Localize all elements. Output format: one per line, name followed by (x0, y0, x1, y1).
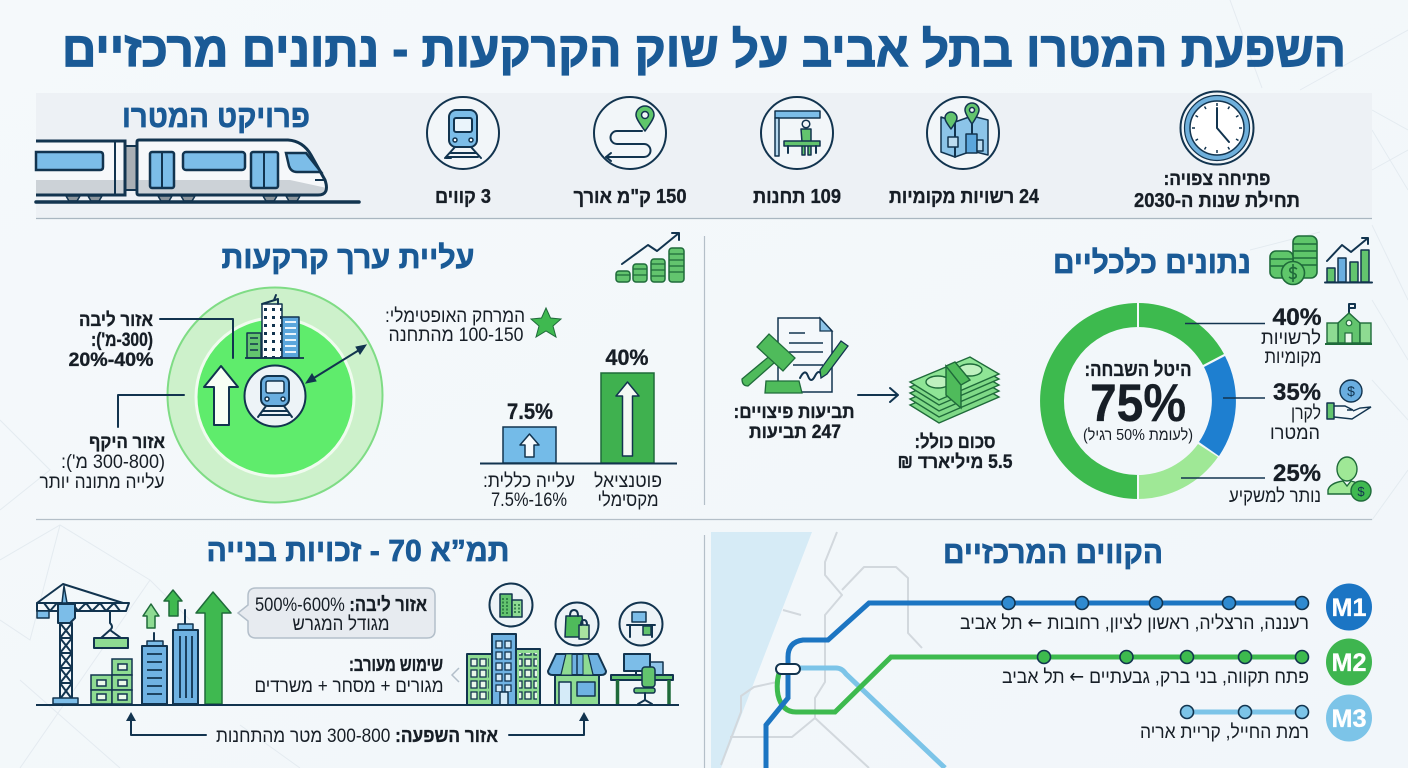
icon: coin stacks with rising line (616, 233, 684, 282)
label: general rise: 16%-7.5% (491, 489, 567, 511)
callout: optimal distance: 100-150 מהתחנה (388, 325, 524, 346)
badge M1 (1326, 584, 1372, 630)
legend: 35% metro fund (1223, 379, 1371, 444)
bar: maximum potential: 40% (606, 345, 648, 370)
heading: תמ”א 70 - זכויות בנייה (206, 533, 510, 568)
stat: expected opening (1134, 92, 1300, 212)
legend: 25% investor share: נותר למשקיע (1229, 485, 1321, 507)
callout: periphery zone (40, 395, 184, 493)
center label: 75% (1090, 374, 1186, 433)
bar: general rise: 7.5% (507, 399, 553, 424)
icon: low tower (142, 633, 167, 704)
legend: 25% investor share (1181, 457, 1371, 507)
panel: TAMA 70 building rights (36, 533, 679, 747)
icon: coins (1270, 236, 1317, 284)
label: maximum potential: מקסימלי (598, 489, 658, 511)
center label (1083, 359, 1193, 444)
line M2 (777, 650, 1308, 712)
icon: hand with coin (1327, 380, 1371, 419)
callout: periphery zone: אזור היקף (89, 432, 165, 453)
text: total amount (898, 432, 1013, 473)
badge M3 (1326, 694, 1372, 742)
callout: core zone 500-600 percent (238, 588, 435, 638)
label: 3 קווים (435, 186, 491, 208)
icon: station shelter (775, 111, 820, 156)
panel: metro project header band (36, 92, 1372, 218)
panel: land value increase (40, 233, 684, 511)
arrow (858, 388, 898, 402)
label: 109 תחנות (753, 186, 841, 208)
badge M1: M1 (1332, 594, 1367, 622)
arrow: small up light (143, 604, 159, 628)
line M3 stations (1180, 706, 1308, 718)
icon: bar chart with trend (1325, 238, 1372, 282)
icon: building blocks (91, 659, 132, 704)
line M1 (766, 596, 1308, 768)
callout: periphery zone: (300-800 מ'): (61, 451, 165, 473)
stat: 150 km length (574, 97, 686, 208)
callout: core zone (68, 310, 233, 371)
icon: route with pin (606, 106, 654, 161)
legend: 35% metro fund: המטרו (1270, 422, 1320, 444)
bar: maximum potential (601, 345, 654, 463)
map: sea and roads (711, 532, 922, 768)
icon: residential towers (467, 634, 540, 705)
text: compensation claims: תביעות פיצויים: (734, 402, 854, 423)
badge M2 (1326, 638, 1372, 686)
label: 150 ק"מ אורך (574, 186, 686, 208)
title: השפעת המטרו בתל אביב על שוק הקרקעות - נתונים מרכזיים (62, 23, 1346, 77)
label: 24 רשויות מקומיות (889, 186, 1040, 208)
heading: עליית ערך קרקעות (222, 240, 474, 275)
label: general rise: עלייה כללית: (483, 470, 575, 492)
text: mixed use: שימוש מעורב: (349, 654, 443, 676)
interchange station (776, 664, 800, 674)
icon: investor: $ (1357, 484, 1365, 499)
label: maximum potential: פוטנציאל (594, 470, 662, 492)
arrow: impact zone right (509, 712, 589, 735)
panel: economic data (734, 236, 1372, 507)
stat: 3 lines (427, 97, 499, 208)
callout: optimal distance (385, 306, 561, 346)
callout: core zone: אזור ליבה (79, 310, 153, 331)
heading: הקווים המרכזיים (943, 535, 1163, 570)
stat: 109 stations (753, 97, 841, 208)
legend: 35% metro fund: 35% (1273, 379, 1321, 406)
icon: star (531, 308, 561, 337)
text: compensation claims (734, 402, 854, 443)
label: maximum potential (594, 470, 662, 511)
icon: office desk (611, 654, 673, 705)
text: mixed use (254, 654, 459, 697)
legend: 35% metro fund: לקרן (1291, 402, 1321, 424)
label: general rise (483, 470, 575, 511)
stat: 24 local authorities (889, 97, 1040, 208)
bar: general rise (503, 399, 556, 463)
text: impact zone: אזור השפעה: 300-800 מטר מהתחנות (216, 725, 498, 747)
panel: main lines (711, 532, 1372, 768)
icon: gavel and document (742, 318, 848, 393)
icon: shop (548, 654, 606, 705)
icon: desk bubble (620, 602, 662, 646)
icon: high tower (173, 610, 198, 704)
icon: map with pins (941, 103, 988, 157)
text: compensation claims: 247 תביעות (749, 422, 841, 443)
icon: station circle with train (244, 366, 306, 426)
heading: metro project: פרויקט המטרו (122, 99, 310, 134)
text: M2 stations: פתח תקווה, בני ברק, גבעתיים ← תל אביב (1002, 665, 1309, 688)
icon: city buildings (245, 295, 304, 358)
chart: betterment levy donut (1040, 303, 1236, 499)
callout: core zone 500-600 percent: אזור ליבה: 600%-500% (255, 594, 427, 616)
center label: היטל השבחה: (1084, 359, 1192, 381)
legend: 40% local authorities: מקומיות (1264, 346, 1322, 368)
callout: core zone 500-600 percent: מגודל המגרש (292, 613, 390, 635)
callout: periphery zone: עלייה מתונה יותר (40, 471, 164, 493)
callout: optimal distance: המרחק האופטימלי: (385, 306, 525, 327)
bar chart: land value rise (480, 345, 677, 511)
label: פתיחה צפויה: (1164, 169, 1270, 190)
line M3 on map (799, 668, 945, 768)
icon: up arrow (204, 366, 238, 425)
text: M1 stations: רעננה, הרצליה, ראשון לציון, רחובות ← תל אביב (960, 611, 1309, 634)
label: תחילת שנות ה-2030 (1134, 190, 1300, 212)
icon: investor (1328, 457, 1371, 501)
icon: train front (445, 110, 481, 158)
arrow: impact zone left (126, 712, 206, 735)
text: M3 stations: רמת החייל, קריית אריה (1140, 721, 1309, 743)
legend: 40% local authorities (1185, 304, 1372, 368)
legend: 40% local authorities: 40% (1272, 304, 1322, 331)
callout: core zone: 40%-20% (68, 350, 154, 371)
center label: (לעומת 50% רגיל) (1083, 426, 1193, 444)
text: mixed use: מגורים + מסחר + משרדים (254, 675, 444, 697)
icon: construction crane (37, 584, 129, 704)
heading: נתונים כלכליים (1053, 245, 1251, 280)
legend: 25% investor share: 25% (1273, 460, 1321, 487)
legend: 40% local authorities: לרשויות (1261, 327, 1321, 349)
callout: core zone: (300-מ'): (91, 330, 153, 351)
text: total amount: 5.5 מיליארד ₪ (898, 452, 1013, 473)
icon: town hall (1325, 304, 1372, 344)
badge M3: M3 (1332, 705, 1366, 733)
icon: shopping bags bubble (556, 602, 598, 646)
icon: buildings bubble (490, 584, 532, 626)
text: total amount: סכום כולל: (914, 432, 996, 453)
badge M2: M2 (1332, 649, 1366, 677)
label (1134, 169, 1300, 212)
icon: metro train (36, 140, 359, 202)
arrow: large up (196, 592, 231, 704)
arrow: small up (164, 590, 182, 616)
icon: hand with coin: $ (1347, 383, 1355, 399)
icon: money stack (910, 357, 999, 423)
icon: clock (1180, 92, 1254, 164)
diagram: concentric zones around station (168, 288, 382, 502)
arrow: distance (306, 345, 366, 383)
